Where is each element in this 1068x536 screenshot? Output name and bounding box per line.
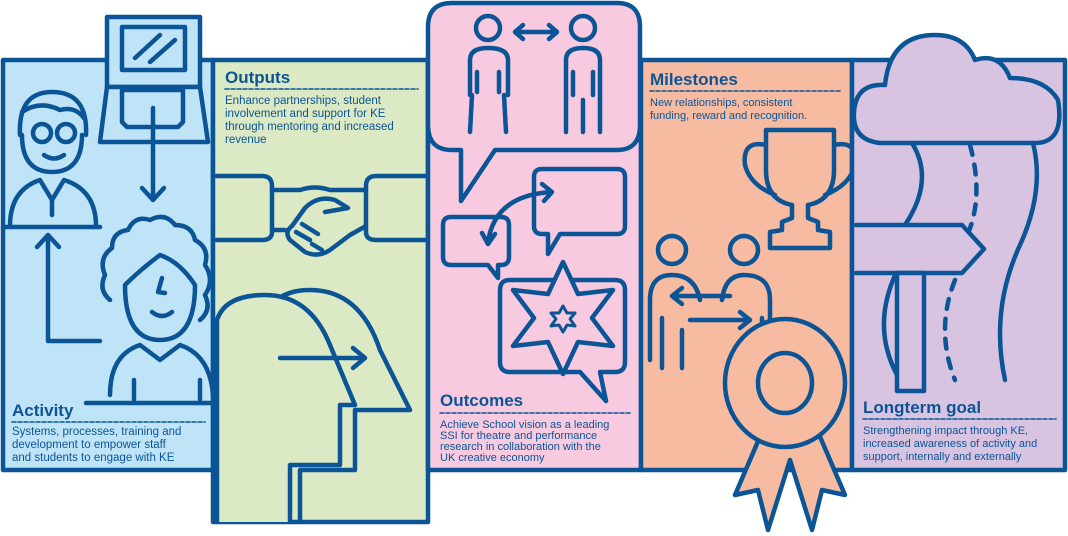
icon: two people exchanging — [650, 236, 770, 368]
heading: Outputs: Outputs — [225, 68, 290, 87]
text: milestones body: New relationships, consistent — [650, 97, 792, 109]
text: activity body: and students to engage with KE — [12, 452, 175, 464]
text: outcomes body: UK creative economy — [440, 452, 545, 464]
icon: trophy — [745, 130, 855, 248]
text: longterm body: Strengthening impact through KE, — [863, 425, 1028, 437]
arrow: down — [142, 108, 164, 200]
text: outcomes body: research in collaboration with the — [440, 441, 601, 453]
icon: signpost — [856, 225, 984, 391]
heading: Milestones: Milestones — [650, 70, 738, 89]
text: outcomes body: SSI for theatre and performance — [440, 430, 597, 442]
icon: woman with curly hair — [86, 217, 213, 403]
icon: two heads with arrow — [217, 290, 410, 522]
text: activity body: Systems, processes, training and — [12, 426, 181, 438]
icon: chat bubbles with curved arrow — [443, 169, 625, 278]
heading: Longterm goal: Longterm goal — [863, 398, 981, 417]
text: outputs body: Enhance partnerships, student — [225, 95, 382, 107]
panel: longterm goal — [852, 35, 1065, 470]
icon: laptop — [100, 17, 208, 142]
icon: winding road — [884, 143, 1037, 380]
arrow: up and right — [37, 235, 100, 341]
icon: man with glasses — [3, 92, 100, 227]
icon: speech bubble with two people — [428, 3, 640, 201]
text: outcomes body: Achieve School vision as a leading — [440, 419, 609, 431]
icon: cloud — [854, 35, 1059, 143]
icon: handshake — [213, 176, 428, 255]
text: longterm body: support, internally and externally — [863, 451, 1022, 463]
heading: Outcomes: Outcomes — [440, 391, 523, 410]
panel: milestones — [641, 60, 855, 530]
text: activity body: development to empower staff — [12, 439, 167, 451]
heading: Activity: Activity — [12, 401, 74, 420]
icon: rosette — [725, 319, 845, 530]
text: outputs body: revenue — [225, 134, 267, 146]
text: milestones body: funding, reward and recognition. — [650, 110, 807, 122]
panel: activity — [3, 17, 213, 470]
text: outputs body: through mentoring and increased — [225, 121, 394, 133]
panel: outcomes — [428, 3, 641, 470]
text: outputs body: involvement and support for KE — [225, 108, 386, 120]
panel: outputs — [213, 60, 428, 522]
icon: star speech bubble — [500, 262, 625, 401]
text: longterm body: increased awareness of activity and — [863, 438, 1037, 450]
